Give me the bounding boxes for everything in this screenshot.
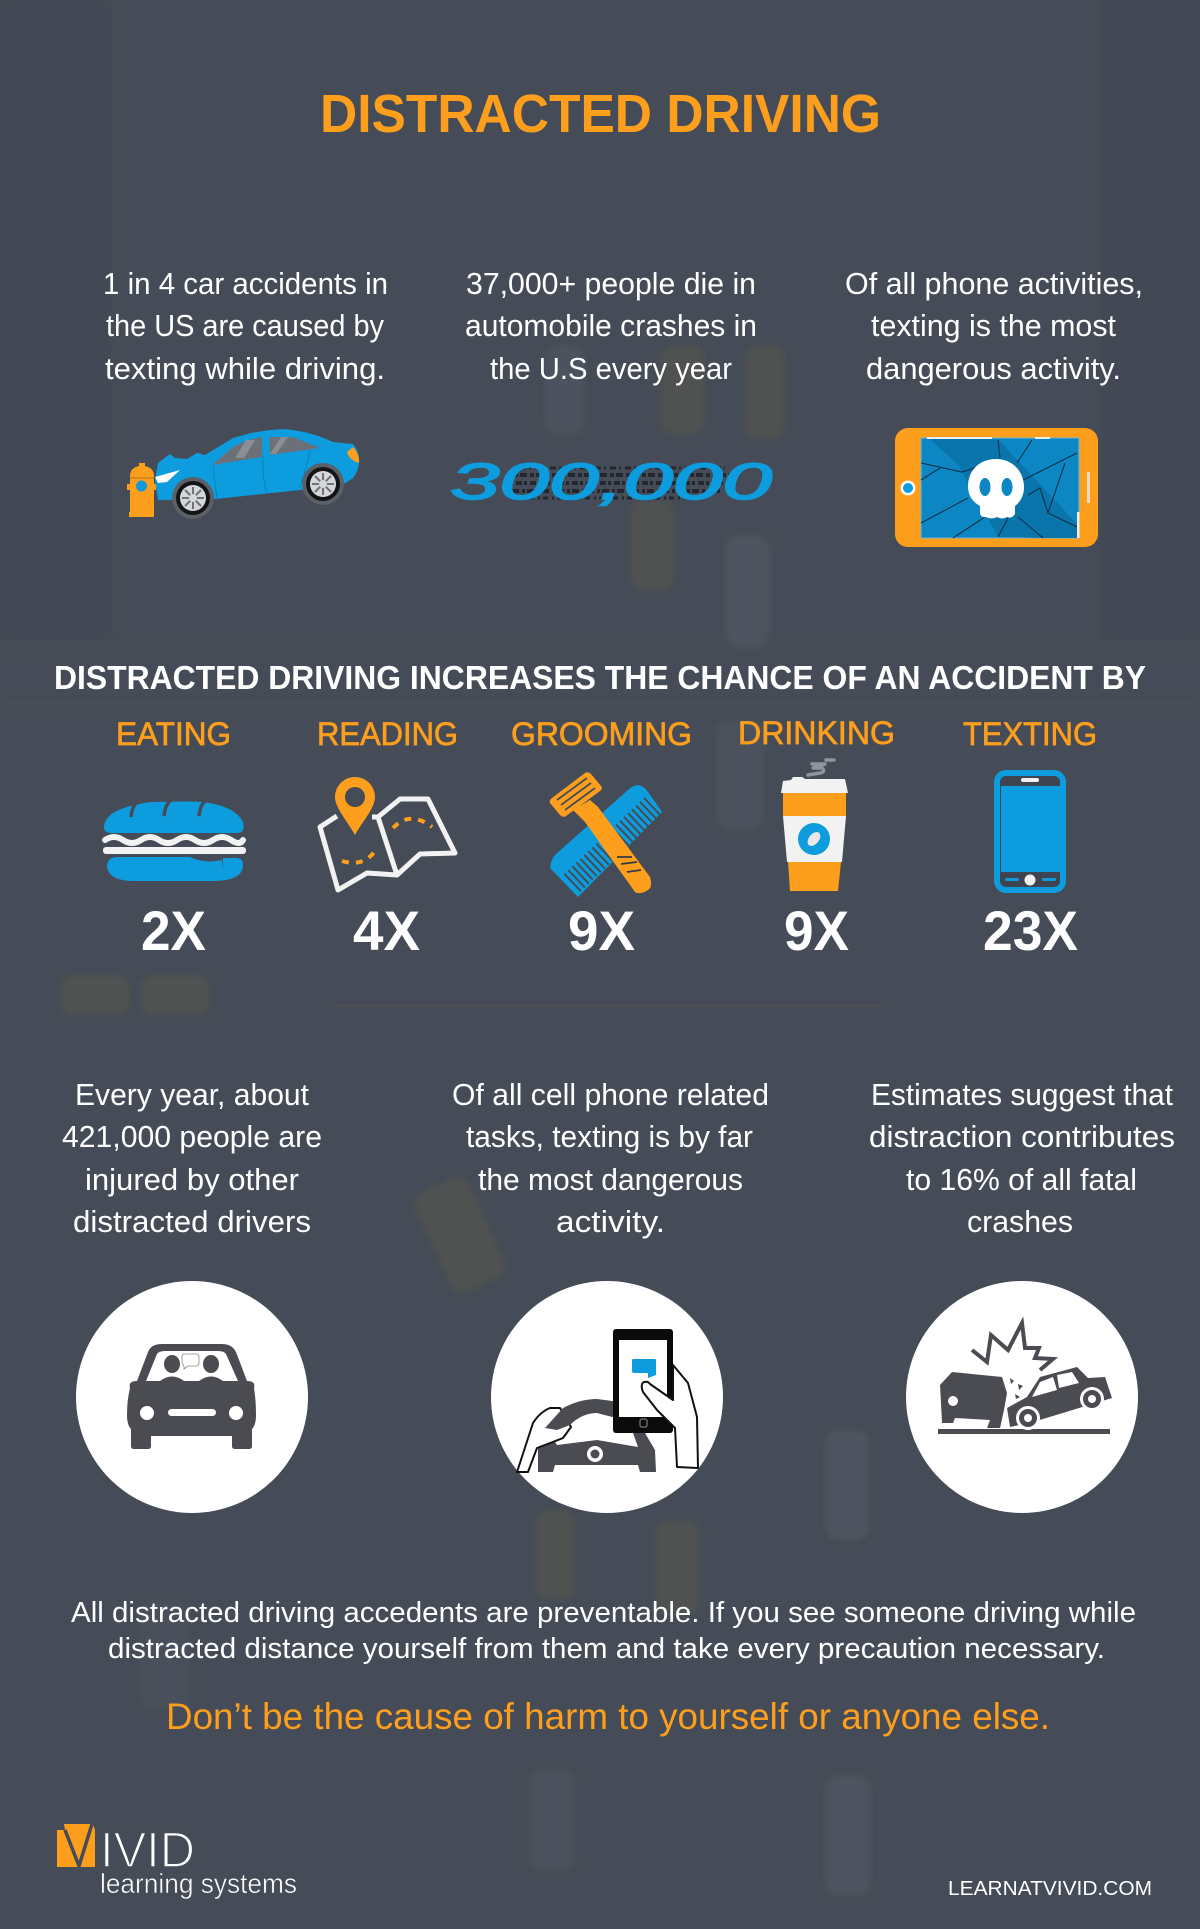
panel: top fact 2 [450, 266, 772, 510]
icon: razor and comb [550, 772, 662, 897]
text: phone activities fact: texting is the most [871, 308, 1116, 343]
text: injuries fact [62, 1077, 322, 1239]
text: prevention message [71, 1597, 1136, 1665]
value: 9X: 9X [568, 899, 635, 962]
text: deaths fact: the U.S every year [490, 351, 732, 386]
panel: drinking [738, 715, 895, 962]
text: phone activities fact: dangerous activity. [866, 351, 1121, 386]
value: 4X: 4X [353, 899, 420, 962]
text: texting accidents fact: texting while driving. [105, 351, 385, 386]
callout: don't be the cause: Don’t be the cause of harm to yourself or anyone else. [166, 1696, 1050, 1737]
label: reading: READING [317, 716, 458, 752]
text: prevention message: All distracted driving accedents are preventable. If you see someone driving while [71, 1597, 1136, 1629]
value: 23X: 23X [983, 899, 1078, 962]
heading: accident chance: DISTRACTED DRIVING INCREASES THE CHANCE OF AN ACCIDENT BY [54, 659, 1146, 696]
icon: sandwich [103, 800, 246, 881]
icon: map and pin [320, 777, 455, 890]
label: texting: TEXTING [963, 716, 1097, 752]
text: phone tasks fact: tasks, texting is by far [466, 1119, 753, 1154]
text: texting accidents fact: the US are caused by [106, 308, 384, 343]
icon: car front in circle [76, 1281, 308, 1513]
text: fatal crashes fact: Estimates suggest that [871, 1077, 1173, 1112]
value: 2X: 2X [141, 899, 206, 962]
text: fatal crashes fact: to 16% of all fatal [906, 1162, 1137, 1197]
icon: tire tracks [510, 468, 735, 498]
label: grooming: GROOMING [511, 716, 692, 752]
text: phone tasks fact: activity. [556, 1204, 665, 1239]
label: drinking: DRINKING [738, 715, 895, 751]
text: texting accidents fact [103, 266, 388, 386]
text: deaths fact: automobile crashes in [465, 308, 757, 343]
footer url: LEARNATVIVID.COM [948, 1878, 1152, 1900]
value: 9X: 9X [784, 899, 849, 962]
icon: smartphone [997, 773, 1063, 890]
text: fatal crashes fact: distraction contributes [869, 1119, 1175, 1154]
text: phone activities fact: Of all phone activities, [845, 266, 1143, 301]
label: eating: EATING [116, 716, 231, 752]
panel: top fact 1 [103, 266, 388, 519]
icon: coffee cup [781, 760, 848, 891]
panel: fatal crashes fact [869, 1077, 1175, 1513]
icon: cracked tablet with skull [895, 428, 1098, 547]
text: fatal crashes fact: crashes [967, 1204, 1073, 1239]
text: injuries fact: distracted drivers [73, 1204, 311, 1239]
text: injuries fact: Every year, about [75, 1077, 309, 1112]
panel: injuries fact [62, 1077, 322, 1513]
text: phone tasks fact: Of all cell phone related [452, 1077, 769, 1112]
panel: top fact 3 [845, 266, 1143, 547]
text: deaths fact: 37,000+ people die in [466, 266, 756, 301]
panel: texting [963, 716, 1097, 962]
panel: grooming [511, 716, 692, 962]
logo: Vivid learning systems: IVID [100, 1822, 195, 1878]
text: phone activities fact [845, 266, 1143, 386]
text: injuries fact: 421,000 people are [62, 1119, 322, 1154]
text: injuries fact: injured by other [85, 1162, 299, 1197]
icon: hands texting at wheel in circle [491, 1281, 723, 1513]
text: prevention message: distracted distance yourself from them and take every precaution necessary. [108, 1633, 1105, 1665]
panel: reading [317, 716, 458, 962]
panel: eating [103, 716, 246, 962]
text: fatal crashes fact [869, 1077, 1175, 1239]
text: texting accidents fact: 1 in 4 car accidents in [103, 266, 388, 301]
text: deaths fact [465, 266, 757, 386]
title: DISTRACTED DRIVING [320, 84, 881, 144]
icon: crashed car and hydrant [127, 429, 359, 519]
logo: Vivid learning systems [57, 1822, 297, 1899]
text: phone tasks fact [452, 1077, 769, 1239]
text: phone tasks fact: the most dangerous [478, 1162, 743, 1197]
logo: Vivid learning systems: learning systems [100, 1868, 297, 1899]
stat: 300,000: 300,000 [450, 453, 772, 510]
icon: car collision in circle [906, 1281, 1138, 1513]
panel: phone tasks fact [452, 1077, 769, 1513]
